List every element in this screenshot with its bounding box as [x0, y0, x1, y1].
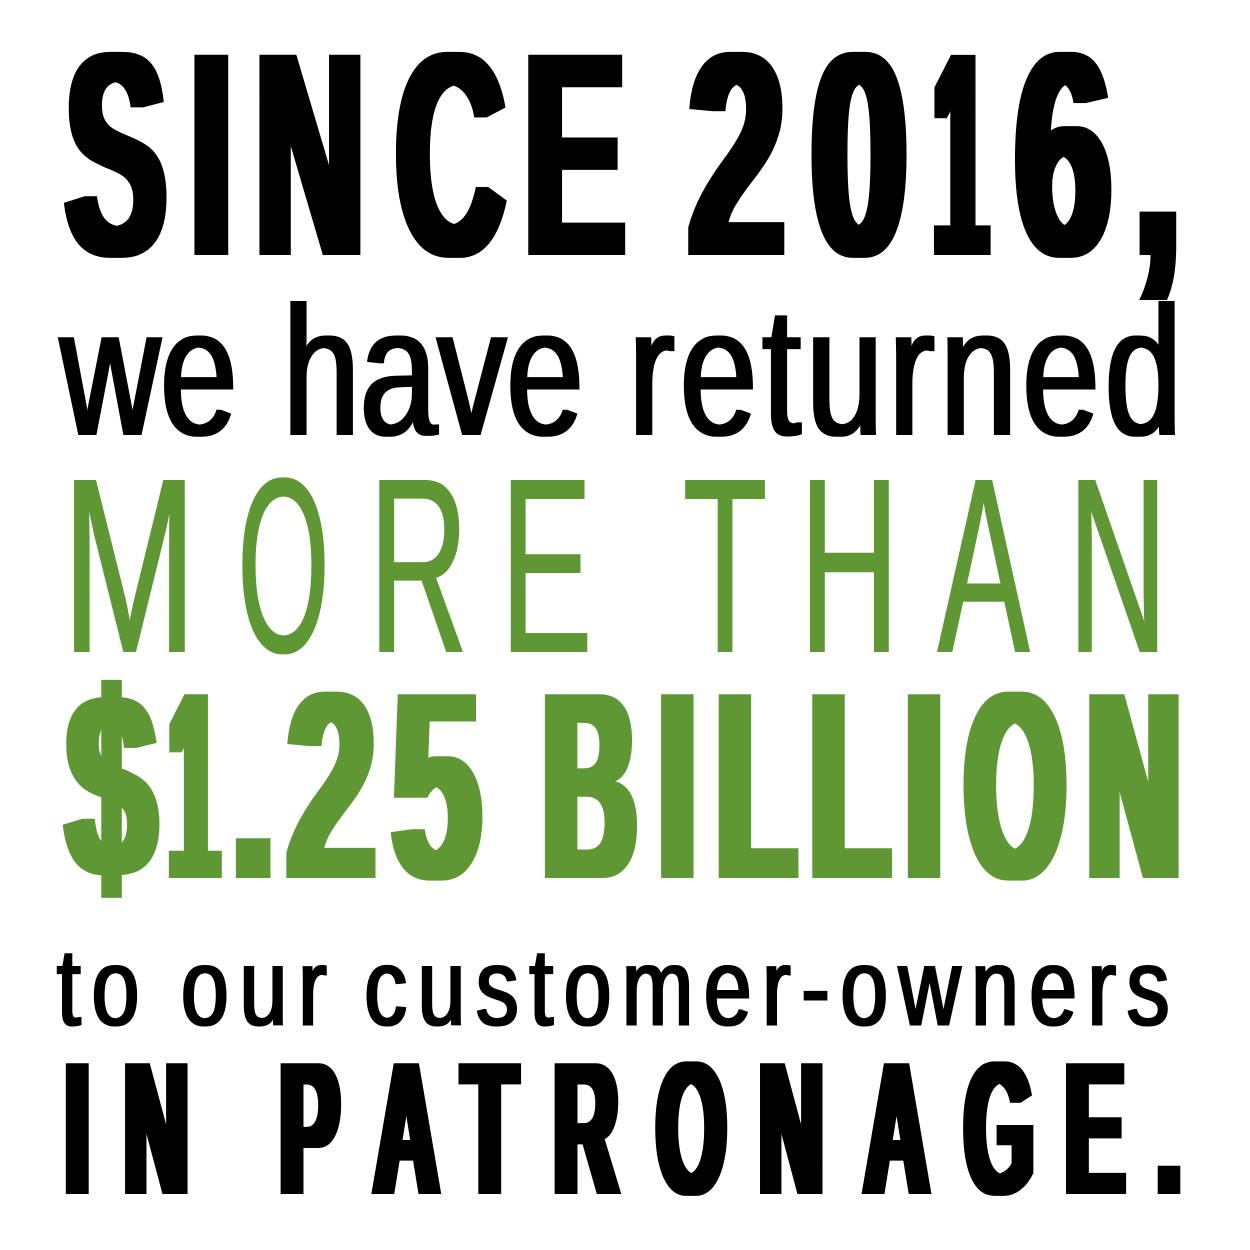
heading line: SINCE 2016,: 6, — [1015, 0, 1182, 317]
text line: we have returned — [59, 268, 1187, 475]
green amount: $1.25 BILLION: $ — [67, 637, 156, 935]
text line: to our customer-owners: to — [57, 926, 150, 1048]
green line: MORE THAN: O — [238, 427, 329, 706]
green amount: $1.25 BILLION: .25 — [231, 637, 481, 935]
green amount: $1.25 BILLION: 1 — [169, 638, 218, 936]
green amount: $1.25 BILLION: BILLION — [543, 637, 1180, 935]
closing line: IN PATRONAGE.: IN PATRONAGE. — [65, 1024, 1181, 1235]
heading line: SINCE 2016,: SINCE — [66, 0, 625, 318]
text line: to our customer-owners: our — [181, 926, 338, 1048]
green line: MORE THAN: M — [62, 426, 197, 705]
green amount: $1.25 BILLION — [67, 637, 1180, 936]
text line: we have returned: we — [59, 268, 237, 475]
text line: we have returned: have — [283, 268, 584, 475]
heading line: SINCE 2016,: 20 — [688, 0, 908, 317]
heading line: SINCE 2016, — [66, 0, 1182, 318]
text line: to our customer-owners: customer-owners — [364, 926, 1180, 1048]
heading line: SINCE 2016,: 1 — [934, 0, 987, 317]
green line: MORE THAN: RE THAN — [369, 425, 1167, 705]
text line: we have returned: returned — [628, 268, 1187, 475]
